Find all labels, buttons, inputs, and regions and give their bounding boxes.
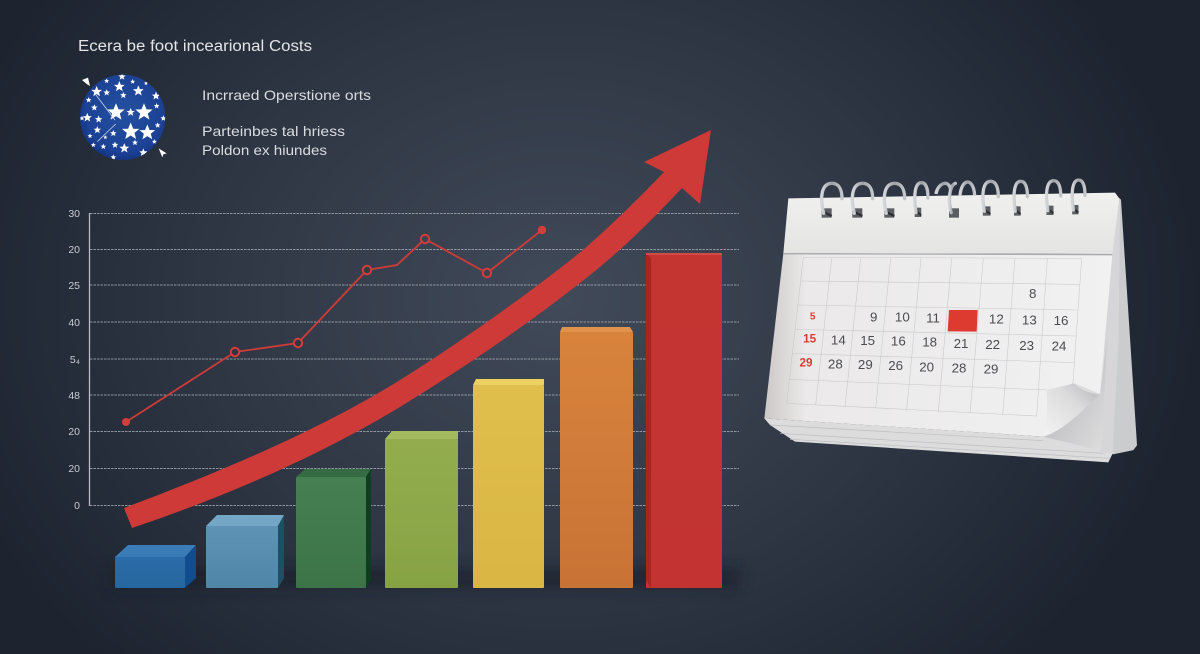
highlighted day	[948, 310, 978, 332]
y-axis labels: 20	[68, 244, 80, 256]
y-axis labels: 5₄	[70, 354, 80, 366]
bar: lime	[385, 431, 458, 588]
bar: blue	[115, 545, 196, 588]
calendar dates: 18	[922, 335, 937, 350]
text: description line one: Parteinbes tal hriess	[202, 123, 345, 139]
bar: orange	[560, 327, 633, 588]
bar: light blue	[206, 515, 284, 588]
y-axis labels: 30	[68, 208, 80, 220]
y-axis labels: 48	[68, 390, 80, 402]
bar: yellow	[473, 379, 544, 588]
page beneath curl	[1043, 337, 1107, 451]
floor shadow	[110, 568, 740, 588]
chart grid and axis	[90, 213, 739, 506]
y-axis labels: 0	[74, 500, 80, 512]
calendar dates: 28	[952, 360, 966, 375]
calendar dates: 29	[984, 362, 998, 377]
calendar dates: 15	[803, 333, 817, 346]
calendar dates: 8	[1029, 286, 1036, 301]
calendar dates: 13	[1022, 312, 1037, 327]
y-axis labels: 20	[68, 426, 80, 438]
page curl	[1043, 383, 1100, 437]
binder rings	[822, 180, 1085, 218]
rising cost arrow	[124, 130, 711, 528]
calendar dates: 23	[1019, 338, 1034, 353]
bar chart	[115, 253, 722, 588]
calendar	[764, 180, 1136, 462]
calendar page stack	[764, 270, 1117, 462]
calendar dates: 16	[1054, 313, 1068, 328]
bar: green	[296, 469, 371, 588]
icon: starry globe	[80, 73, 167, 160]
calendar back stand	[1113, 195, 1136, 453]
calendar dates: 29	[858, 357, 873, 372]
calendar dates: 5	[810, 312, 816, 323]
line chart	[122, 226, 546, 426]
calendar main page	[764, 253, 1112, 437]
calendar dates: 15	[860, 333, 875, 348]
calendar dates: 21	[954, 336, 968, 351]
calendar dates: 26	[888, 358, 903, 373]
calendar dates: 16	[891, 334, 906, 349]
y-axis labels: 40	[68, 317, 80, 329]
bar: red	[646, 253, 722, 588]
title: Ecera be foot incearional Costs	[78, 38, 312, 55]
calendar dates: 28	[828, 356, 843, 371]
calendar dates: 14	[831, 332, 846, 347]
calendar dates: 22	[985, 337, 1000, 352]
calendar dates: 11	[926, 311, 940, 326]
calendar dates: 10	[895, 310, 910, 325]
calendar dates: 20	[919, 359, 934, 374]
calendar header	[783, 193, 1119, 254]
calendar dates: 12	[989, 312, 1004, 327]
calendar dates: 29	[800, 357, 813, 370]
y-axis labels: 25	[68, 280, 80, 292]
calendar dates	[800, 286, 1068, 377]
y-axis labels: 20	[68, 463, 80, 475]
y-axis labels	[68, 208, 80, 512]
calendar dates: 24	[1052, 339, 1067, 354]
text: description line two: Poldon ex hiundes	[202, 142, 327, 158]
page grid	[787, 257, 1082, 416]
calendar dates: 9	[870, 309, 877, 324]
text: operations line: Incrraed Operstione orts	[202, 87, 371, 103]
